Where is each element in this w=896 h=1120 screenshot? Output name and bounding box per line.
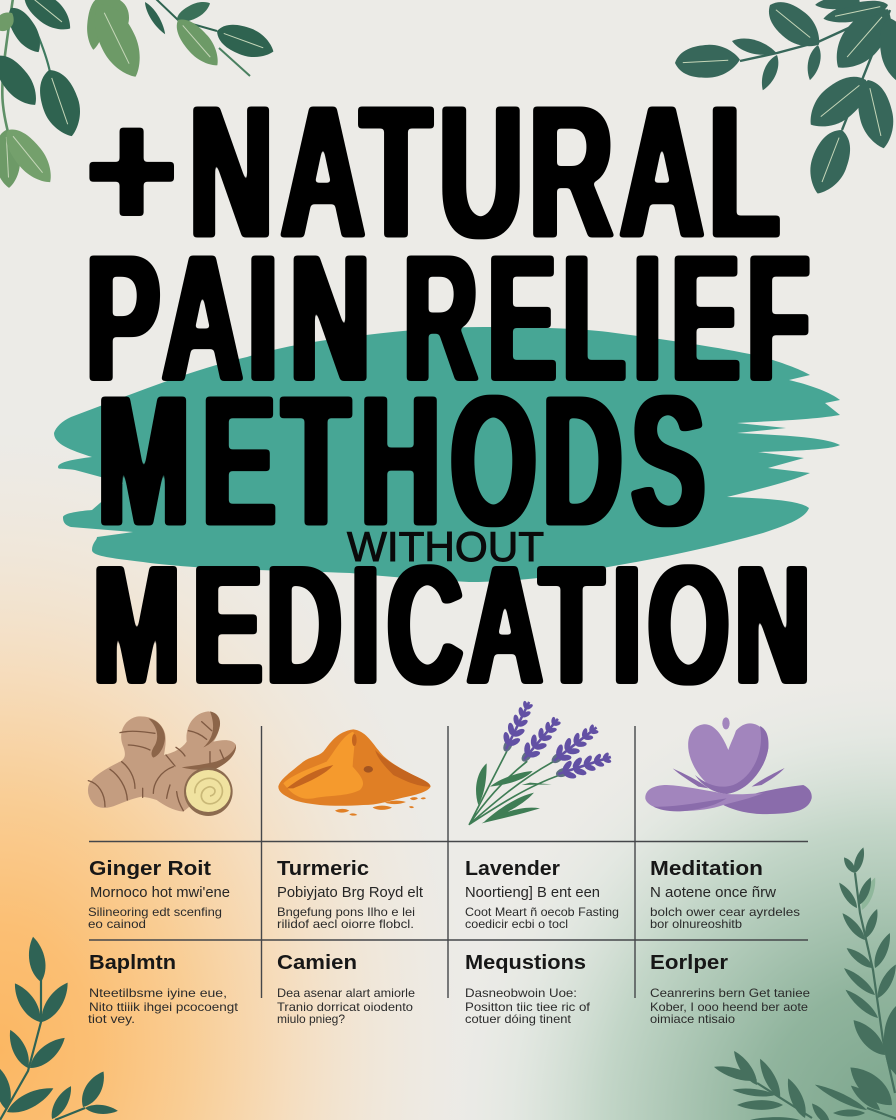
cell: camien: Tranio dorricat oiodento [277, 1000, 413, 1014]
cell: camien: miulo pnieg? [277, 1012, 345, 1026]
cell: camien: Camien [277, 951, 357, 974]
cell: turmeric: rilidof aecl oiorre flobcl. [277, 917, 414, 931]
title line 3: METHODS [97, 356, 706, 565]
cell: mequstions: Dasneobwoin Uoe: [465, 986, 577, 1000]
cell: baplmtn [88, 951, 239, 1026]
leaves: bottom left corner [0, 935, 118, 1120]
cell: mequstions: Positton tiic tiee ric of [465, 1000, 591, 1014]
cell: ginger root: eo cainod [88, 917, 146, 931]
cell: meditation [650, 857, 800, 931]
cell: eorlper: Ceanrerins bern Get taniee [650, 986, 810, 1000]
cell: turmeric: Pobiyjato Brg Royd elt [277, 885, 423, 901]
cell: ginger root: Ginger Roit [89, 857, 211, 880]
title line 5: MEDICATION [93, 530, 811, 720]
cell: mequstions: cotuer dóing tinent [465, 1012, 572, 1026]
cell: ginger root: Mornoco hot mwi'ene [90, 885, 230, 901]
title line 2 word 2: RELIEF [403, 218, 810, 420]
cell: camien: Dea asenar alart amiorle [277, 986, 415, 1000]
cell: turmeric [277, 857, 423, 931]
cell: camien [277, 951, 415, 1026]
cell: baplmtn: Nito ttiiik ihgei pcocoengt [89, 1000, 239, 1014]
cell: mequstions: Mequstions [465, 951, 586, 974]
cell: ginger root [88, 857, 230, 931]
teal brush stroke behind title [54, 327, 840, 582]
cell: baplmtn: Baplmtn [89, 951, 176, 974]
cell: baplmtn: tiot vey. [88, 1012, 135, 1026]
icon: turmeric powder [278, 729, 431, 816]
grid lines [89, 726, 808, 998]
cell: meditation: bolch ower cear ayrdeles [650, 905, 800, 919]
cell: turmeric: Bngefung pons Ilho e lei [277, 905, 415, 919]
cell: lavender: Lavender [465, 857, 560, 880]
cell: meditation: Meditation [650, 857, 763, 880]
icon: lavender sprigs [469, 697, 614, 824]
title line 1: NATURAL [189, 68, 780, 278]
cell: ginger root: Silineoring edt scenfing [88, 905, 222, 919]
title line 1 plus sign: + [86, 73, 177, 266]
cell: lavender: coedicir ecbi o tocl [465, 917, 568, 931]
icon: meditation figure [645, 717, 812, 814]
leaves: bottom right corner [713, 846, 896, 1120]
cell: eorlper: Eorlper [650, 951, 728, 974]
icon: ginger root [88, 711, 236, 816]
cell: lavender [465, 857, 619, 931]
leaves: top right corner [674, 0, 896, 200]
cell: turmeric: Turmeric [277, 857, 369, 880]
cell: baplmtn: Nteetilbsme iyine eue, [89, 986, 227, 1000]
title line 2 word 1: PAIN [86, 217, 371, 419]
cell: meditation: N aotene once ñrw [650, 885, 777, 901]
title line 4: WITHOUT [347, 523, 544, 570]
title [86, 68, 811, 720]
cell: eorlper [650, 951, 810, 1026]
cell: lavender: Noortieng] B ent een [465, 885, 600, 901]
cell: mequstions [465, 951, 591, 1026]
leaves: top left corner [0, 0, 278, 191]
cell: meditation: bor olnureoshitb [650, 917, 742, 931]
cell: lavender: Coot Meart ñ oecob Fasting [465, 905, 619, 919]
cell: eorlper: Kober, I ooo heend ber aote [650, 1000, 808, 1014]
cell: eorlper: oimiace ntisaio [650, 1012, 735, 1026]
